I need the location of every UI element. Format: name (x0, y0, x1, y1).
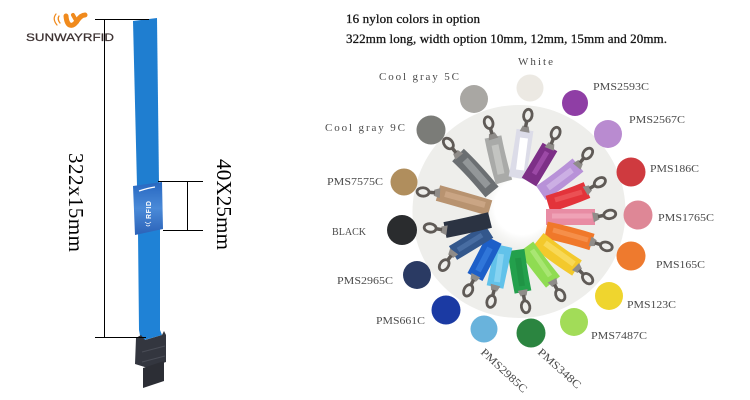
swatch: BLACK (387, 215, 417, 245)
swatch: PMS348C (516, 318, 546, 348)
lanyard: green (516, 250, 532, 314)
lanyard: royal blue (461, 240, 494, 298)
label: PMS2985C: PMS2985C (478, 346, 529, 395)
lanyard: steel blue (437, 231, 489, 273)
label: PMS2965C: PMS2965C (337, 275, 393, 287)
panel: colour wheel background (412, 105, 626, 318)
heading line 1: 16 nylon colors in option (346, 11, 480, 26)
lanyard: silver (482, 115, 504, 182)
dimension lines: tag (158, 182, 203, 230)
swatch: PMS123C (595, 282, 623, 310)
swatch: PMS1765C (624, 200, 652, 230)
swatch: White (516, 74, 544, 102)
lanyard: navy (424, 220, 490, 235)
lanyard: lilac (541, 146, 595, 193)
swatch: PMS7575C (390, 168, 418, 196)
swatch: Cool gray 9C (416, 116, 446, 144)
label: BLACK: BLACK (332, 226, 366, 238)
swatch: PMS186C (616, 158, 646, 186)
swatch: Cool gray 5C (460, 85, 488, 113)
swatch: PMS2985C (470, 316, 498, 342)
swatch: PMS2593C (562, 90, 588, 116)
label: Cool gray 5C: Cool gray 5C (379, 71, 459, 83)
label: PMS1765C: PMS1765C (658, 212, 714, 224)
dimension label: strap: 322x15mm (64, 153, 88, 252)
label: PMS165C: PMS165C (656, 259, 705, 271)
label: PMS661C: PMS661C (376, 315, 425, 327)
lanyard samples fan (417, 108, 617, 314)
lanyard: orange (546, 230, 614, 253)
lanyard: tan (417, 187, 490, 208)
label: PMS123C: PMS123C (627, 299, 676, 311)
dimension lines: strap length (95, 20, 149, 338)
plastic buckle (135, 331, 166, 388)
label: PMS186C: PMS186C (650, 163, 699, 175)
icon: orange signal swoosh (54, 14, 85, 25)
label: White: White (518, 56, 553, 68)
lanyard: dark gray (441, 136, 492, 192)
swatch: PMS2965C (403, 261, 431, 289)
swatch: PMS661C (432, 296, 460, 324)
lower strap (138, 228, 162, 341)
swatch: PMS2567C (594, 120, 622, 148)
lanyard: sky blue (485, 246, 504, 309)
lanyard: yellow (538, 240, 595, 286)
swatch: PMS7487C (560, 308, 588, 336)
product: blue wristband lanyard (133, 18, 166, 388)
heading text (346, 11, 667, 46)
label: Cool gray 9C: Cool gray 9C (325, 122, 405, 134)
logo wordmark: SUNWAYRFID (26, 32, 114, 44)
swatch: PMS165C (616, 242, 646, 270)
lanyard: white (517, 108, 534, 178)
label: PMS7487C: PMS7487C (591, 330, 647, 342)
lanyard: pink (546, 208, 617, 222)
colour labels (325, 56, 714, 395)
lanyard: light green (526, 247, 568, 303)
label: PMS348C: PMS348C (535, 346, 583, 391)
RFID tag: RFID (146, 201, 153, 219)
lanyard: red (548, 175, 608, 204)
RFID tag (133, 182, 163, 235)
upper strap (133, 18, 159, 186)
dimension label: tag: 40X25mm (212, 159, 236, 250)
label: PMS2593C: PMS2593C (593, 81, 649, 93)
label: PMS7575C: PMS7575C (327, 176, 383, 188)
colour swatches (387, 74, 652, 348)
logo: SUNWAYRFID (26, 14, 114, 44)
heading line 2: 322mm long, width option 10mm, 12mm, 15mm and 20mm. (346, 31, 667, 46)
lanyard: purple (529, 126, 563, 182)
label: PMS2567C: PMS2567C (629, 114, 685, 126)
